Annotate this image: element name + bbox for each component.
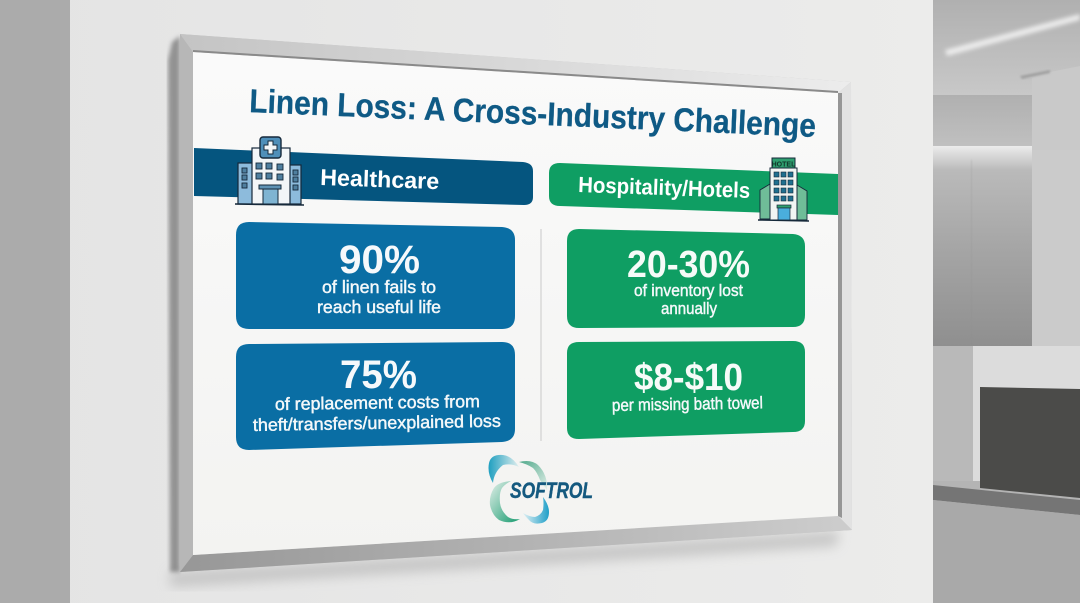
icon: hotel: HOTEL <box>772 162 796 168</box>
stat card: 75%: 75% <box>340 353 417 397</box>
stat card: 75%: theft/transfers/unexplained loss <box>253 411 501 435</box>
hospitality banner <box>549 163 838 215</box>
logo wordmark: SOFTROL <box>510 478 593 503</box>
divider <box>540 229 542 441</box>
stat card: 75%: of replacement costs from <box>275 391 480 414</box>
healthcare banner <box>194 148 533 205</box>
panel: hospitality <box>549 158 838 439</box>
icon: hotel <box>758 158 809 221</box>
stat card: 90%: of linen fails to <box>322 277 436 297</box>
logo: Softrol <box>488 455 593 524</box>
stat card: 20-30% <box>567 229 805 328</box>
healthcare heading: Healthcare <box>320 164 440 194</box>
stat card: $8-$10 <box>567 341 805 439</box>
stat card: 90%: reach useful life <box>317 297 441 317</box>
stat card: 20-30%: of inventory lost <box>634 281 743 300</box>
stat card: $8-$10: $8-$10 <box>634 357 743 399</box>
picture frame <box>180 34 852 572</box>
stat card: 90% <box>236 222 515 329</box>
panel: healthcare <box>194 137 533 450</box>
stat card: $8-$10: per missing bath towel <box>612 393 763 415</box>
title: Linen Loss: A Cross-Industry Challenge <box>249 82 817 144</box>
stat card: 20-30%: 20-30% <box>627 244 750 286</box>
frame shadow <box>168 36 840 586</box>
icon: hospital <box>235 137 304 205</box>
stat card: 90%: 90% <box>339 238 420 282</box>
hospitality heading: Hospitality/Hotels <box>578 172 751 203</box>
stat card: 20-30%: annually <box>661 299 717 318</box>
stat card: 75% <box>236 342 515 450</box>
logo swirl <box>488 455 549 524</box>
blurred office interior <box>933 0 1080 603</box>
